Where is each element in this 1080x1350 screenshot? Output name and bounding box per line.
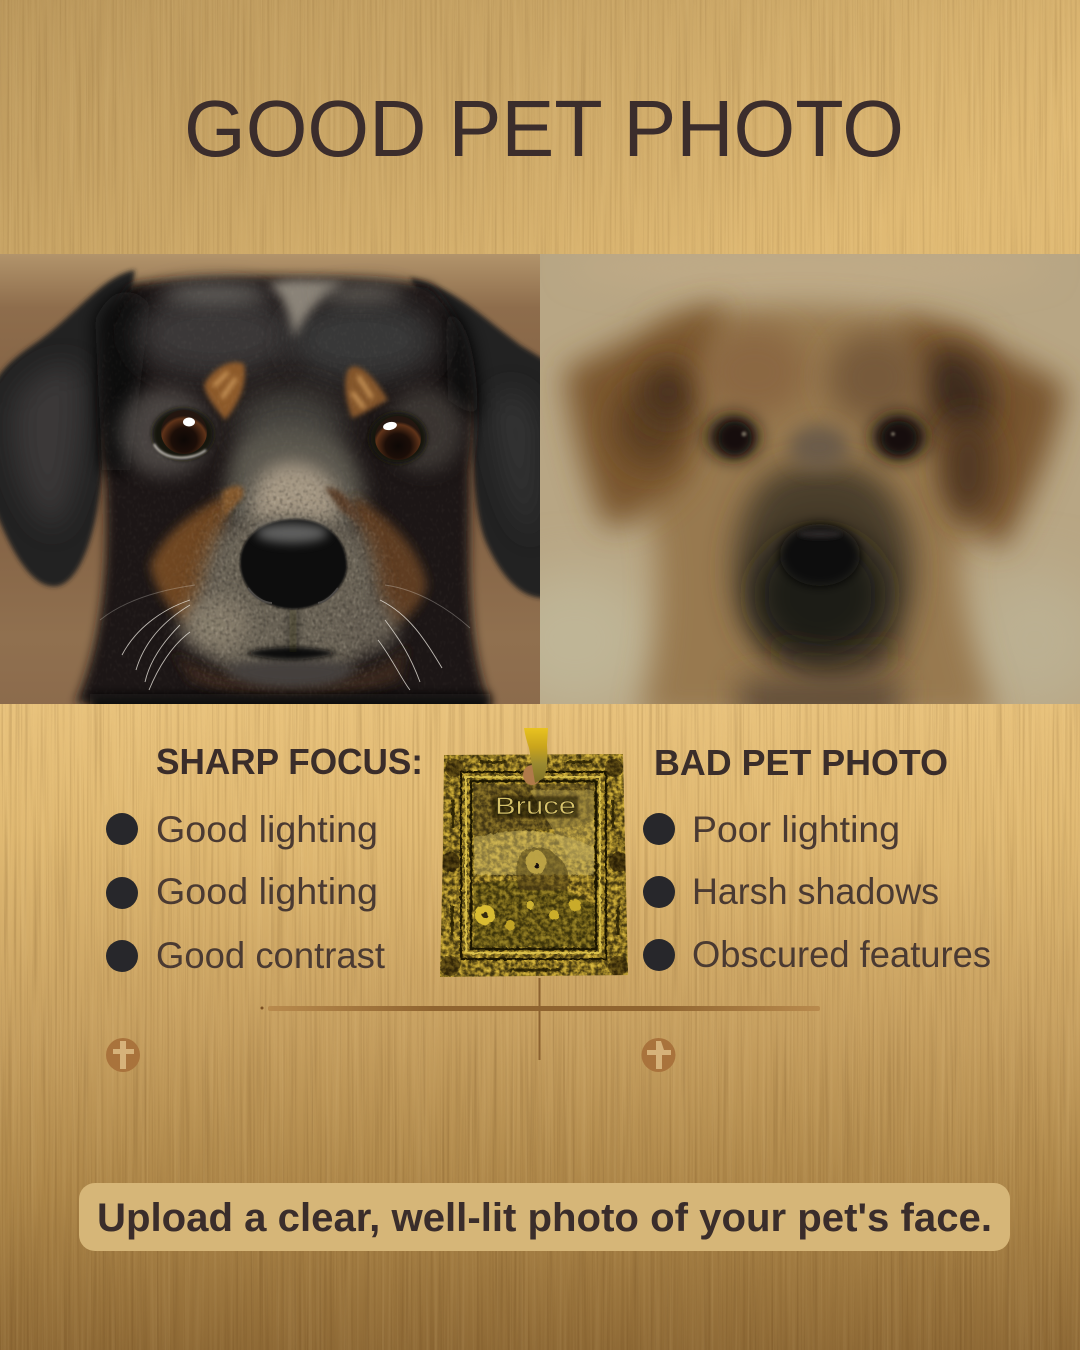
corner ornaments	[445, 759, 463, 777]
list: bad photo traits	[643, 809, 991, 975]
chin	[225, 659, 355, 688]
right ear	[410, 278, 548, 598]
nose	[780, 524, 860, 586]
eye sockets	[119, 388, 211, 476]
frame lines	[461, 772, 606, 959]
list: good photo traits	[106, 809, 386, 976]
muzzle bridge	[226, 428, 364, 530]
muzzle	[734, 464, 913, 672]
hole	[523, 765, 541, 785]
callout: upload instruction	[79, 1183, 1010, 1251]
heading: bad pet photo: BAD PET PHOTO	[654, 742, 948, 783]
pendant plate	[436, 750, 634, 982]
heading: sharp focus: SHARP FOCUS:	[156, 741, 423, 782]
left ear	[565, 305, 725, 526]
right ear	[900, 320, 1065, 546]
photo: sharp dog portrait	[0, 254, 548, 714]
title: GOOD PET PHOTO	[184, 84, 904, 173]
engraved name: Bruce	[495, 793, 576, 820]
callout: upload instruction: Upload a clear, well-lit photo of your pet's face.	[97, 1196, 992, 1240]
sky and trees	[474, 784, 594, 845]
icon: right screw	[642, 1038, 676, 1072]
photo: blurred dog portrait	[540, 254, 1080, 704]
muzzle speckle	[180, 470, 395, 680]
muzzle	[197, 517, 379, 680]
head	[640, 307, 995, 720]
forehead	[135, 293, 295, 377]
name strip	[492, 796, 578, 818]
pendant with engraved name	[436, 728, 634, 982]
head fur sheen	[114, 310, 447, 662]
right eye	[369, 412, 427, 464]
eyes	[707, 415, 759, 459]
bullet item: poor lighting: Poor lighting	[692, 809, 900, 850]
dog relief	[516, 848, 569, 890]
brows tan	[204, 362, 245, 420]
bullet item: good contrast: Good contrast	[156, 935, 386, 976]
flowers	[474, 880, 594, 947]
bullet item: good lighting second: Good lighting	[156, 871, 378, 912]
forehead	[720, 322, 806, 416]
bullet item: good lighting: Good lighting	[156, 809, 378, 850]
nose	[240, 519, 347, 609]
divider lines	[260, 978, 820, 1060]
head and shoulders	[75, 276, 490, 704]
whiskers	[100, 585, 470, 690]
pendant bail	[524, 728, 548, 783]
icon: left screw	[106, 1038, 140, 1072]
left eye	[152, 408, 214, 460]
bullet item: obscured features: Obscured features	[692, 934, 991, 975]
left ear	[0, 270, 135, 586]
tan cheeks	[150, 495, 226, 625]
bullet item: harsh shadows: Harsh shadows	[692, 871, 939, 912]
